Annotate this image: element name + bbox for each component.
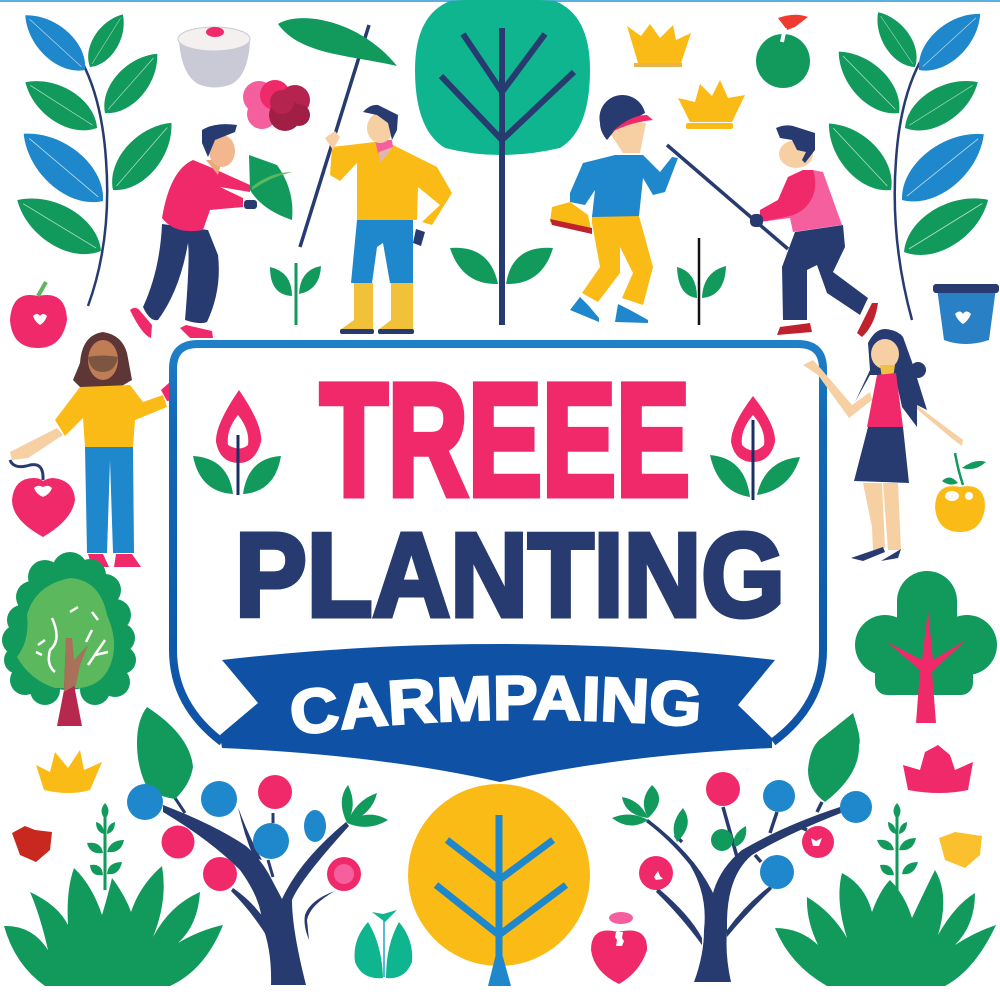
banner text: CARMPAING: CARMPAING: [291, 675, 699, 734]
icon: red apple with heart: [10, 282, 67, 348]
left berry tree: [127, 707, 388, 985]
left round tree: [2, 552, 136, 726]
right berry tree: [612, 713, 872, 982]
seedling left of centre: [270, 263, 321, 325]
teal bud sprout: [355, 910, 412, 978]
icon: white bowl: [178, 27, 250, 88]
icon: yellow crown plant top: [627, 24, 691, 67]
yellow circle tree: [408, 784, 590, 986]
top right leafy branch: [815, 2, 999, 320]
icon: yellow crown bottom left: [36, 750, 102, 793]
icon: green apple: [756, 15, 810, 88]
title: TREEE: TREEE: [320, 350, 690, 529]
central teal tree: [415, 0, 590, 325]
sprig bottom left: [87, 803, 124, 890]
right round tree: [855, 571, 997, 723]
icon: yellow apple: [935, 453, 986, 532]
icon: blue bucket: [933, 284, 999, 344]
person: gardener with long pole: [667, 125, 878, 337]
icon: left flower emblem: [193, 390, 281, 495]
icon: pink lotus: [903, 745, 973, 793]
title: PLANTING: PLANTING: [235, 509, 785, 642]
sign frame: [173, 344, 823, 742]
ribbon banner: [220, 644, 775, 782]
person: woman in pink holding sign: [803, 329, 963, 561]
top left leafy branch: [7, 3, 185, 306]
icon: yellow leaf: [939, 832, 982, 868]
icon: orange crown plant: [678, 80, 745, 129]
person: woman in yellow holding sign: [10, 332, 176, 567]
person: gardener in yellow shirt with leaf net: [278, 18, 452, 334]
bush bottom left: [4, 866, 223, 986]
icon: pink flower: [243, 80, 310, 131]
bush bottom right: [775, 870, 996, 986]
person: child in blue shirt with box: [550, 95, 678, 323]
icon: red flower: [12, 826, 52, 862]
icon: bottom pink apple: [591, 912, 647, 984]
seedling right of centre: [677, 238, 726, 325]
sprig bottom right: [877, 803, 918, 890]
icon: hanging heart fruit: [10, 460, 75, 537]
person: gardener in red shirt: [130, 124, 293, 338]
icon: right flower emblem: [710, 396, 800, 500]
